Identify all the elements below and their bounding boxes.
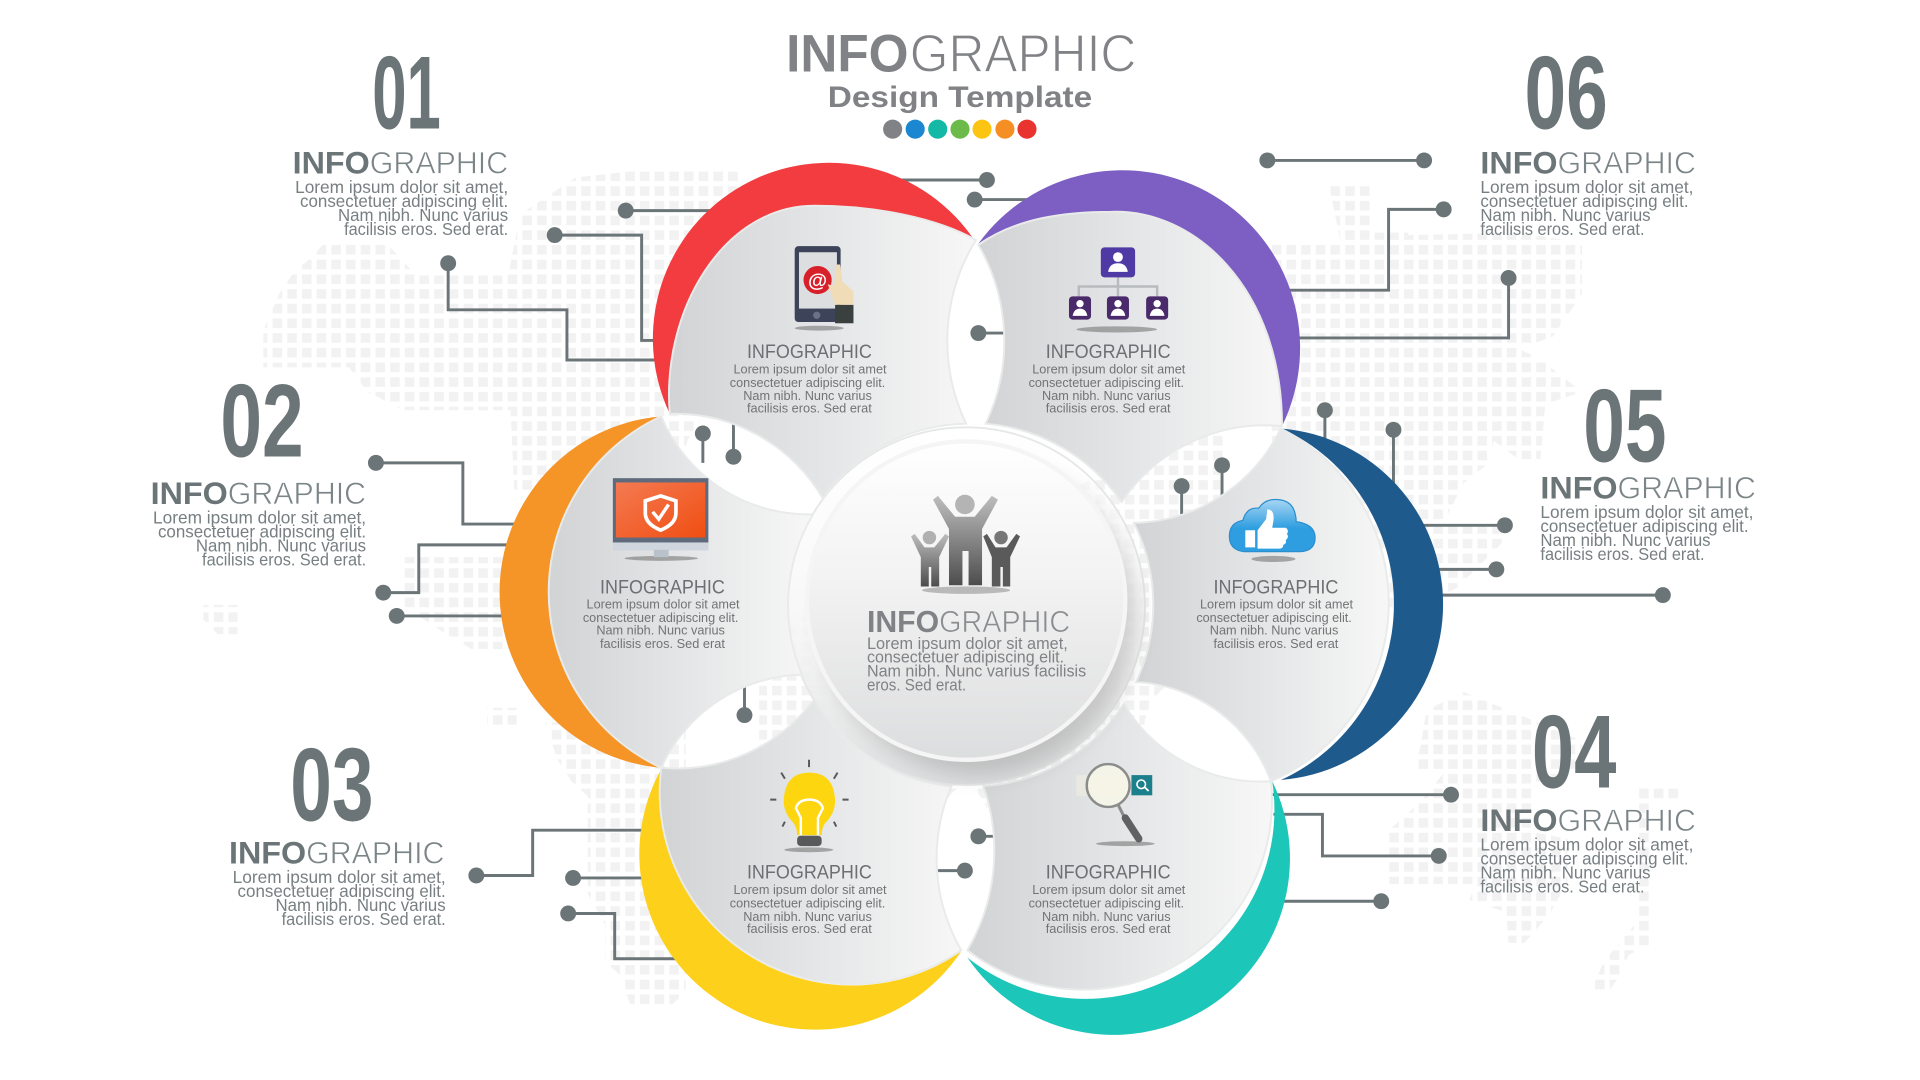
red petal body — [669, 206, 976, 498]
heading 02: GRAPHIC — [228, 475, 366, 511]
center heading — [867, 605, 1070, 639]
body 05: consectetuer adipiscing elit. — [1540, 516, 1749, 536]
body 01: consectetuer adipiscing elit. — [300, 191, 508, 211]
body 06 — [1480, 177, 1693, 239]
orange petal description: Lorem ipsum dolor sit amet — [587, 597, 740, 612]
connectors: yellow section — [468, 828, 994, 959]
center text block — [867, 605, 1086, 695]
blue petal description: consectetuer adipiscing elit. — [1196, 610, 1352, 625]
icon: light bulb — [770, 760, 849, 852]
body 01: Nam nibh. Nunc varius — [338, 205, 508, 225]
center ring — [787, 427, 1145, 785]
icon: cloud with thumbs up — [1229, 499, 1315, 562]
purple petal description: consectetuer adipiscing elit. — [1029, 375, 1184, 390]
body 03: consectetuer adipiscing elit. — [238, 881, 446, 901]
icon: tablet with @ and hand — [795, 246, 853, 331]
teal petal description: consectetuer adipiscing elit. — [1029, 895, 1184, 910]
heading 04 — [1480, 802, 1696, 838]
blue petal description: facilisis eros. Sed erat — [1213, 636, 1339, 651]
center description — [867, 634, 1086, 695]
connectors: purple section — [967, 152, 1517, 341]
body 03: Lorem ipsum dolor sit amet, — [233, 867, 446, 887]
body 05: facilisis eros. Sed erat. — [1540, 544, 1704, 564]
yellow petal description — [730, 882, 887, 936]
panel: teal petal — [967, 704, 1290, 1035]
panel: section 06 — [1480, 36, 1696, 239]
body 02 — [153, 507, 366, 570]
icon: monitor with shield — [613, 478, 708, 561]
heading 06: GRAPHIC — [1558, 144, 1696, 180]
panel: blue petal — [1134, 429, 1443, 781]
number 02: 02 — [220, 364, 304, 480]
heading 04: INFO — [1480, 802, 1558, 838]
purple petal description: facilisis eros. Sed erat — [1046, 401, 1171, 416]
center disc shadow — [823, 462, 1136, 775]
blue petal heading: INFOGRAPHIC — [1213, 577, 1338, 598]
panel text: red petal — [730, 342, 887, 416]
number 05: 05 — [1583, 369, 1667, 485]
orange petal description: consectetuer adipiscing elit. — [583, 610, 738, 625]
heading 01: GRAPHIC — [370, 144, 508, 180]
body 03 — [233, 867, 446, 929]
panel: section 02 — [151, 364, 366, 570]
title heading: GRAPHIC — [910, 25, 1136, 84]
orange crescent — [500, 416, 661, 768]
teal crescent — [967, 781, 1290, 1035]
red petal description: Nam nibh. Nunc varius — [743, 388, 872, 403]
purple crescent — [978, 170, 1300, 426]
purple petal description — [1029, 361, 1186, 416]
red petal description: facilisis eros. Sed erat — [747, 401, 872, 416]
blue petal description: Nam nibh. Nunc varius — [1210, 622, 1339, 637]
title heading — [786, 25, 1136, 84]
subtitle: Design Template — [828, 81, 1092, 114]
connectors: red section — [440, 172, 995, 360]
heading 03: GRAPHIC — [306, 834, 444, 870]
center heading: GRAPHIC — [939, 605, 1070, 639]
body 02: facilisis eros. Sed erat. — [202, 550, 366, 570]
center disc — [807, 441, 1125, 760]
body 06: Nam nibh. Nunc varius — [1480, 205, 1651, 225]
body 04: Lorem ipsum dolor sit amet, — [1480, 834, 1693, 854]
heading 06: INFO — [1480, 144, 1558, 180]
heading 03 — [229, 834, 444, 870]
body 02: Lorem ipsum dolor sit amet, — [153, 507, 366, 527]
blue petal description: Lorem ipsum dolor sit amet — [1200, 597, 1353, 612]
center description: Lorem ipsum dolor sit amet, — [867, 634, 1068, 653]
panel: red petal — [653, 163, 976, 498]
yellow petal heading: INFOGRAPHIC — [747, 863, 872, 884]
yellow petal description: consectetuer adipiscing elit. — [730, 895, 885, 910]
heading 05 — [1540, 469, 1756, 505]
yellow petal description: Nam nibh. Nunc varius — [743, 909, 872, 924]
orange petal description: facilisis eros. Sed erat — [600, 636, 725, 651]
panel: section 04 — [1480, 694, 1696, 897]
center description: consectetuer adipiscing elit. — [867, 647, 1064, 666]
purple petal body — [978, 212, 1282, 502]
body 02: Nam nibh. Nunc varius — [196, 536, 366, 556]
purple petal description: Nam nibh. Nunc varius — [1042, 388, 1171, 403]
center description: Nam nibh. Nunc varius facilisis — [867, 662, 1086, 681]
purple petal description: Lorem ipsum dolor sit amet — [1032, 361, 1186, 376]
icon: magnifier over search bar — [1076, 764, 1155, 846]
connectors: teal section — [1267, 787, 1459, 909]
body 02: consectetuer adipiscing elit. — [158, 522, 366, 542]
teal petal description: facilisis eros. Sed erat — [1046, 921, 1171, 936]
panel: section 05 — [1540, 369, 1756, 564]
icon: center family — [911, 495, 1020, 594]
panel: purple petal — [978, 170, 1300, 502]
yellow crescent — [639, 769, 961, 1030]
orange petal body — [549, 416, 813, 768]
body 06: Lorem ipsum dolor sit amet, — [1480, 177, 1693, 197]
teal petal description — [1029, 882, 1186, 936]
red petal description: Lorem ipsum dolor sit amet — [733, 361, 887, 376]
body 04 — [1480, 834, 1693, 897]
body 04: facilisis eros. Sed erat. — [1480, 877, 1644, 897]
number 01: 01 — [372, 36, 441, 152]
background dotted world map — [203, 169, 1682, 1009]
heading 01 — [293, 144, 508, 180]
title — [786, 25, 1136, 139]
red petal heading: INFOGRAPHIC — [747, 342, 872, 363]
white lens backgrounds between petals — [683, 404, 1261, 948]
orange petal description: Nam nibh. Nunc varius — [596, 622, 725, 637]
heading 04: GRAPHIC — [1558, 802, 1696, 838]
color dots — [883, 120, 1037, 139]
icon: tablet with @ and hand: @ — [808, 270, 827, 292]
center heading: INFO — [867, 605, 939, 639]
body 04: consectetuer adipiscing elit. — [1480, 848, 1689, 868]
red petal description: consectetuer adipiscing elit. — [730, 375, 885, 390]
number 03: 03 — [290, 727, 373, 843]
orange petal heading: INFOGRAPHIC — [600, 577, 725, 598]
panel: yellow petal — [639, 699, 961, 1030]
center description: eros. Sed erat. — [867, 676, 966, 695]
teal petal description: Nam nibh. Nunc varius — [1042, 909, 1171, 924]
body 01: facilisis eros. Sed erat. — [344, 219, 508, 239]
panel: section 01 — [293, 36, 508, 239]
body 06: facilisis eros. Sed erat. — [1480, 219, 1644, 239]
connectors: blue section — [1174, 402, 1671, 603]
body 06: consectetuer adipiscing elit. — [1480, 191, 1689, 211]
connector lines — [368, 152, 1671, 959]
title heading: INFO — [786, 25, 909, 84]
panel text: purple petal — [1029, 342, 1186, 416]
heading 06 — [1480, 144, 1696, 180]
body 01: Lorem ipsum dolor sit amet, — [295, 177, 508, 197]
number 06: 06 — [1524, 36, 1608, 152]
heading 03: INFO — [229, 834, 306, 870]
heading 01: INFO — [293, 144, 370, 180]
panel text: orange petal — [583, 577, 740, 651]
body 03: facilisis eros. Sed erat. — [282, 909, 446, 929]
yellow petal body — [660, 699, 961, 984]
body 05: Lorem ipsum dolor sit amet, — [1540, 502, 1753, 522]
body 03: Nam nibh. Nunc varius — [276, 895, 446, 915]
orange petal description — [583, 597, 740, 651]
connectors: orange section — [368, 422, 752, 723]
body 05 — [1540, 502, 1753, 564]
heading 02: INFO — [151, 475, 228, 511]
body 05: Nam nibh. Nunc varius — [1540, 530, 1711, 550]
blue petal body — [1134, 429, 1389, 781]
panel: orange petal — [500, 416, 813, 768]
body 04: Nam nibh. Nunc varius — [1480, 863, 1651, 883]
number 04: 04 — [1532, 694, 1616, 810]
panel text: yellow petal — [730, 863, 887, 936]
panel text: teal petal — [1029, 863, 1186, 936]
red crescent — [653, 163, 976, 414]
teal petal body — [967, 704, 1272, 990]
teal petal description: Lorem ipsum dolor sit amet — [1032, 882, 1186, 897]
teal petal heading: INFOGRAPHIC — [1046, 863, 1171, 884]
blue crescent — [1281, 429, 1443, 780]
heading 02 — [151, 475, 366, 511]
panel text: blue petal — [1196, 577, 1353, 651]
yellow petal description: Lorem ipsum dolor sit amet — [733, 882, 887, 897]
panel: section 03 — [229, 727, 446, 929]
purple petal heading: INFOGRAPHIC — [1046, 342, 1171, 363]
heading 05: GRAPHIC — [1618, 469, 1756, 505]
yellow petal description: facilisis eros. Sed erat — [747, 921, 872, 936]
red petal description — [730, 361, 887, 416]
heading 05: INFO — [1540, 469, 1618, 505]
body 01 — [295, 177, 508, 239]
blue petal description — [1196, 597, 1353, 651]
icon: org chart — [1069, 247, 1168, 332]
